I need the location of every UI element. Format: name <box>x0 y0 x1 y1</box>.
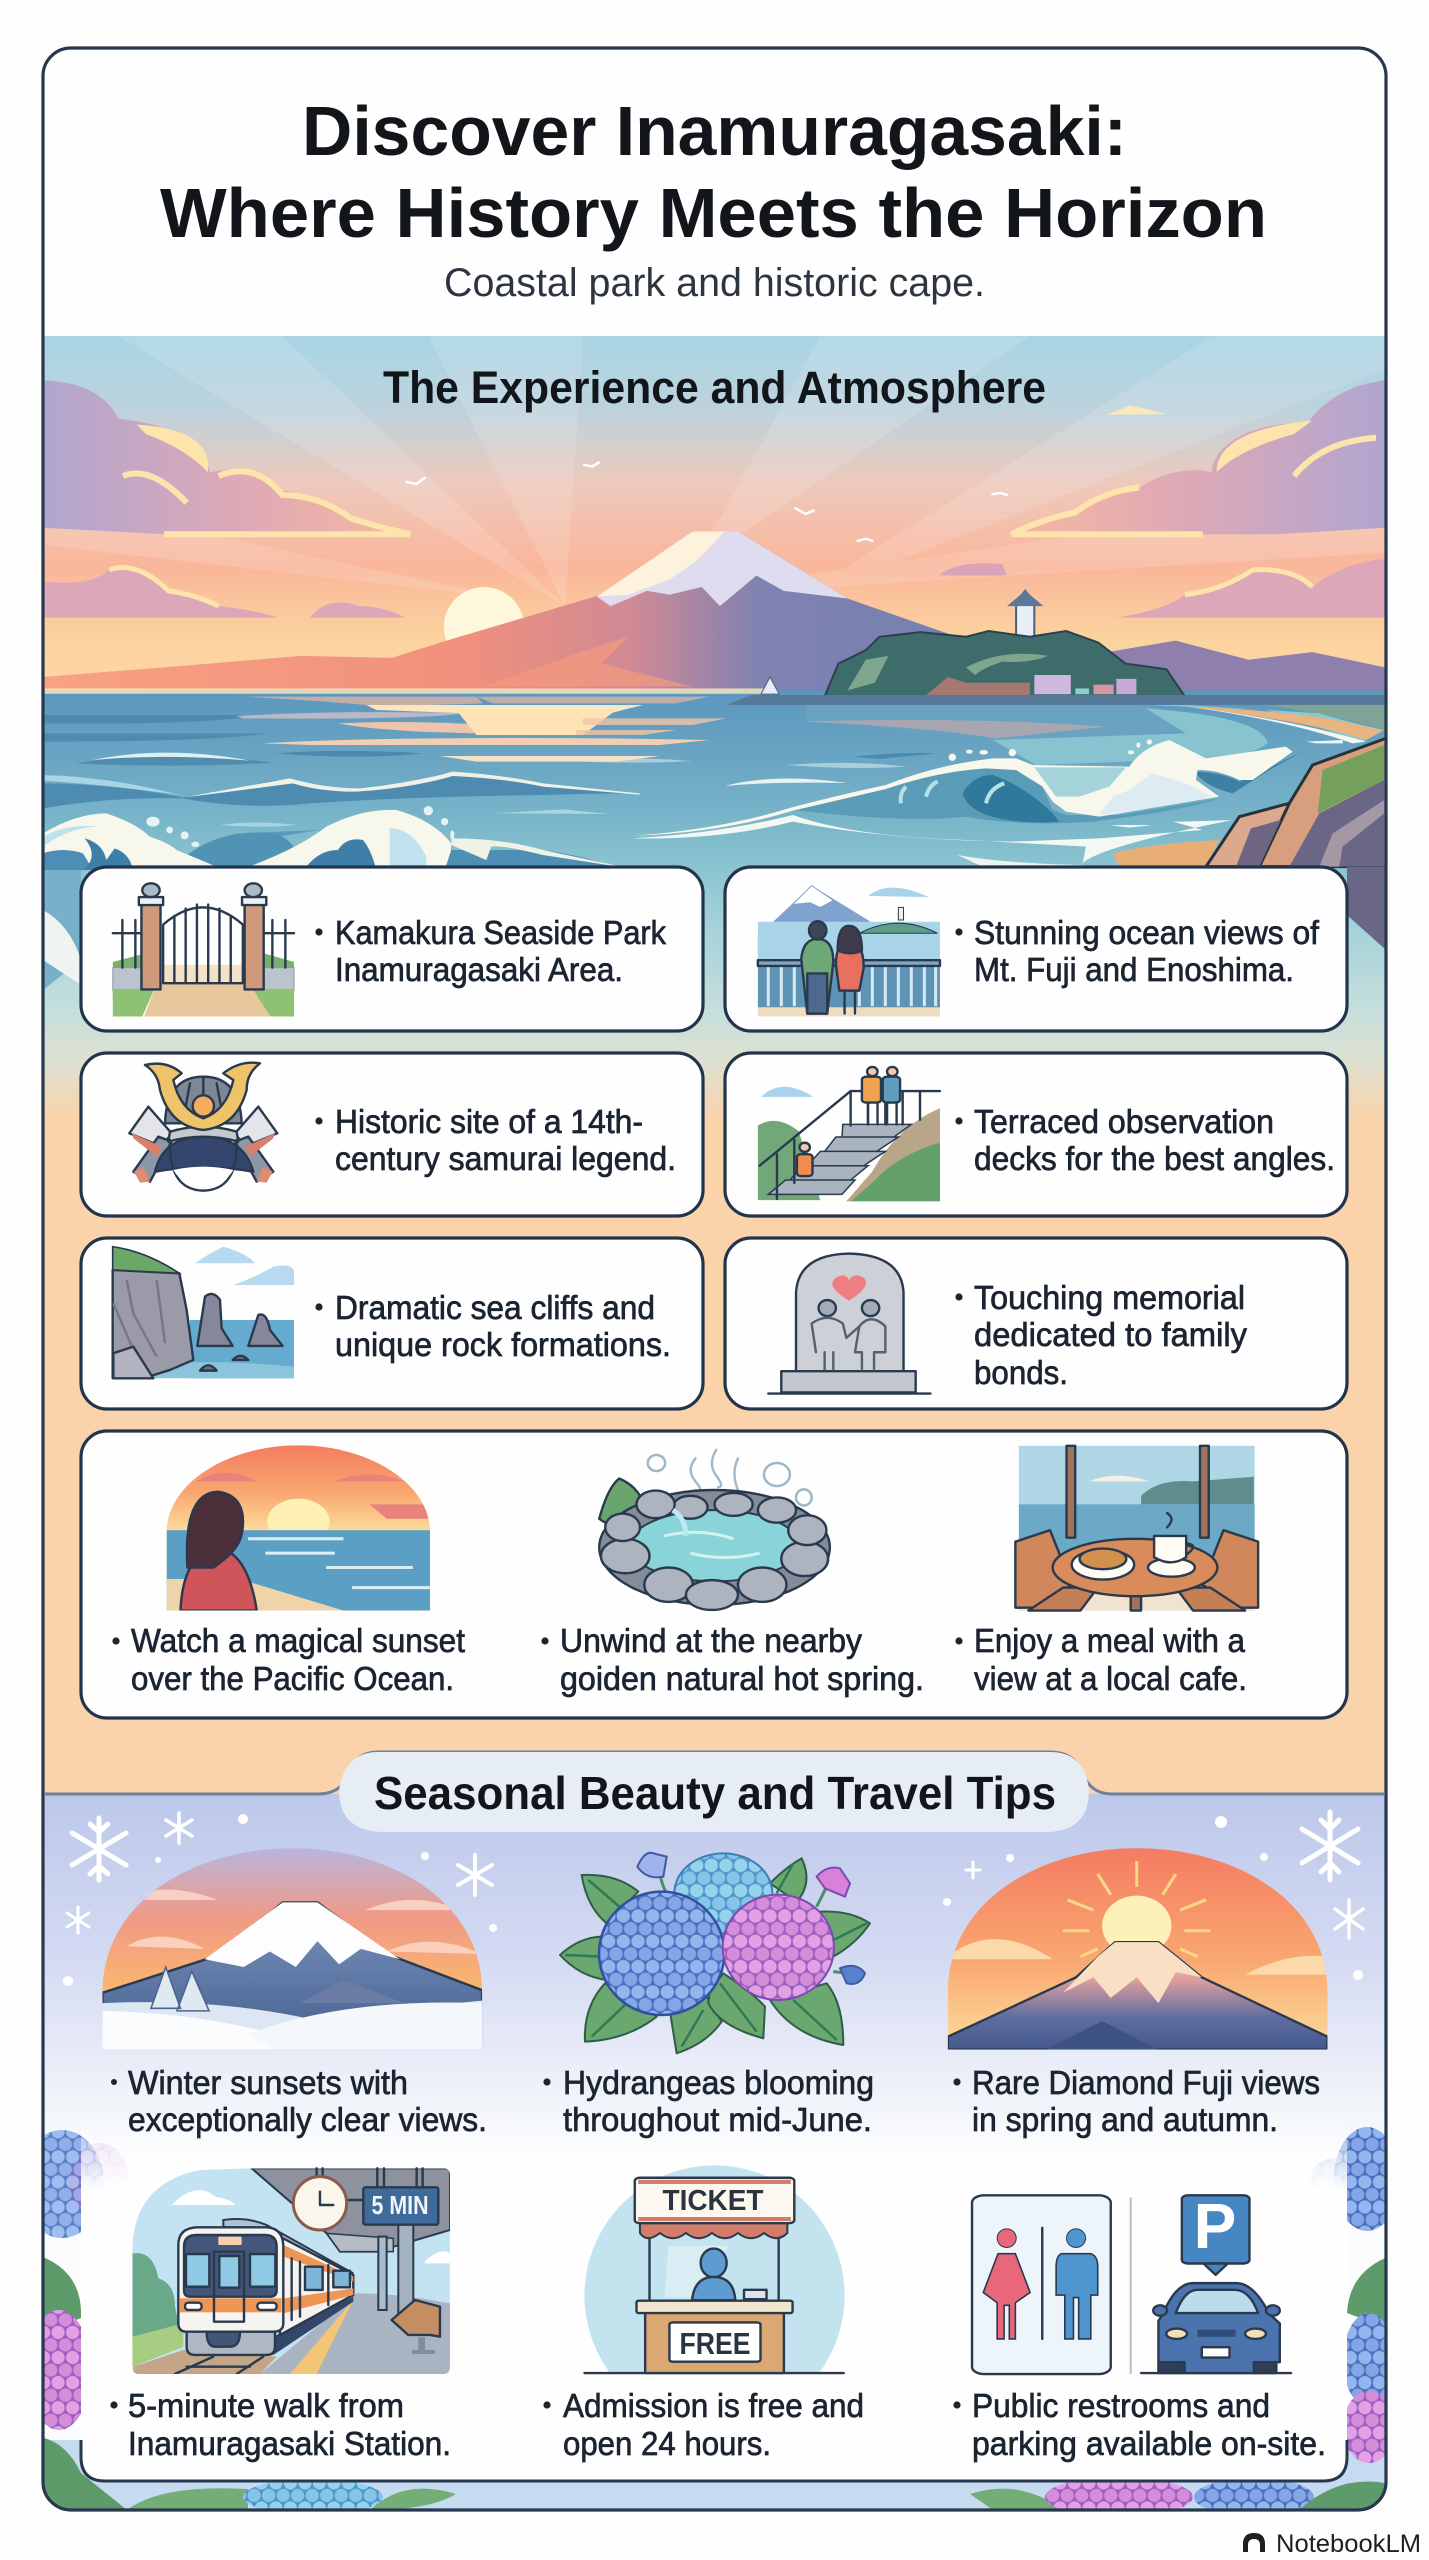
text: sunset: over the Pacific Ocean. <box>131 1660 454 1697</box>
panel: ocean views <box>725 867 1347 1031</box>
icon: sea cliffs and rocks <box>113 1247 294 1378</box>
heading pill: Seasonal Beauty and Travel Tips <box>339 1752 1089 1832</box>
icon: natural hot spring <box>599 1450 830 1610</box>
horizon glow <box>43 688 772 694</box>
icon: cafe table with ocean view <box>1015 1446 1258 1611</box>
title line 2: Where History Meets the Horizon <box>160 174 1267 252</box>
text: cafe: Enjoy a meal with a <box>974 1622 1246 1659</box>
text: ocean views: Mt. Fuji and Enoshima. <box>974 951 1294 988</box>
snow cap <box>597 532 848 606</box>
text: hydrangeas: Hydrangeas blooming <box>563 2064 874 2101</box>
text: hot spring: goiden natural hot spring. <box>560 1660 924 1697</box>
text: hydrangeas: throughout mid-June. <box>563 2101 872 2138</box>
panel: observation decks <box>725 1053 1347 1216</box>
icon: train at station <box>132 2168 450 2374</box>
label: 5 MIN: 5 MIN <box>372 2190 428 2220</box>
text: hot spring <box>541 1622 924 1697</box>
text: memorial: dedicated to family <box>974 1316 1247 1353</box>
text: admission: open 24 hours. <box>563 2425 771 2462</box>
text: hot spring: Unwind at the nearby <box>560 1622 862 1659</box>
icon: samurai helmet <box>129 1063 277 1191</box>
heading: The Experience and Atmosphere: The Experience and Atmosphere <box>383 362 1046 413</box>
text: Kamakura Seaside Park <box>315 914 666 988</box>
white lower panel <box>81 2110 1347 2481</box>
subtitle: Coastal park and historic cape. <box>444 261 985 305</box>
icon: terraced stairs <box>758 1067 940 1201</box>
panel: memorial <box>725 1238 1347 1409</box>
icon: memorial stone with heart <box>768 1254 930 1394</box>
icon: Diamond Fuji sunrise <box>948 1848 1327 2050</box>
icon: woman watching sunset <box>167 1445 430 1611</box>
icon: free ticket booth <box>584 2165 845 2373</box>
clouds left <box>43 380 410 534</box>
text: memorial: bonds. <box>974 1354 1068 1391</box>
lower panel edge <box>81 2440 1347 2481</box>
icon: hydrangeas <box>560 1853 870 2053</box>
text: winter sunsets: Winter sunsets with <box>128 2064 408 2101</box>
text: observation decks: decks for the best angles. <box>974 1140 1335 1177</box>
far hills <box>1111 640 1384 690</box>
label: FREE: FREE <box>680 2326 750 2361</box>
icon: winter Mt. Fuji sunset <box>102 1848 482 2050</box>
text: memorial: Touching memorial <box>974 1279 1245 1316</box>
sun rays <box>43 336 1385 606</box>
text: observation decks: Terraced observation <box>974 1103 1274 1140</box>
text: walk from station <box>110 2387 451 2462</box>
foam and cliff beside cards <box>43 867 1386 990</box>
text: admission: Admission is free and <box>563 2387 864 2424</box>
panel: Kamakura Seaside Park <box>81 867 703 1031</box>
text: restrooms and parking <box>953 2387 1326 2462</box>
text: samurai legend: Historic site of a 14th- <box>335 1103 643 1140</box>
text: sunset <box>112 1622 465 1697</box>
label: P: P <box>1194 2190 1236 2262</box>
hero illustration: sunset over sea with Mt. Fuji and Enoshima <box>43 336 1386 1795</box>
sun <box>444 587 523 640</box>
icon: park gate <box>113 883 294 1016</box>
clouds right <box>1012 380 1385 534</box>
title line 1: Discover Inamuragasaki: <box>302 92 1127 170</box>
title block <box>160 92 1267 305</box>
sea and waves, left half <box>43 697 726 870</box>
panel: sunset, hot spring and cafe <box>81 1431 1347 1718</box>
text: samurai legend <box>315 1103 676 1177</box>
section divider with tab <box>44 1752 1385 1794</box>
bottom blue strip <box>43 2440 1386 2512</box>
text: hydrangeas <box>543 2064 874 2138</box>
birds <box>406 462 1008 541</box>
NotebookLM badge: NotebookLM <box>1276 2530 1421 2558</box>
text: samurai legend: century samurai legend. <box>335 1140 676 1177</box>
text: memorial <box>955 1279 1247 1391</box>
text: Diamond Fuji <box>953 2064 1320 2138</box>
text: winter sunsets <box>111 2064 487 2138</box>
text: Diamond Fuji: in spring and autumn. <box>972 2101 1278 2138</box>
panel: samurai legend <box>81 1053 703 1216</box>
text: sunset: Watch a magical sunset <box>131 1622 465 1659</box>
text: Kamakura Seaside Park: Inamuragasaki Area. <box>335 951 623 988</box>
text: cafe <box>955 1622 1247 1697</box>
text: ocean views <box>955 914 1320 988</box>
text: sea cliffs: unique rock formations. <box>335 1326 671 1363</box>
text: winter sunsets: exceptionally clear views. <box>128 2101 487 2138</box>
text: observation decks <box>955 1103 1335 1177</box>
icon: couple viewing Mt. Fuji and Enoshima <box>758 886 940 1016</box>
text: sea cliffs <box>315 1289 671 1363</box>
text: walk from station: 5-minute walk from <box>128 2387 404 2424</box>
text: restrooms and parking: Public restrooms and <box>972 2387 1270 2424</box>
heading pill: Seasonal Beauty and Travel Tips: Seasonal Beauty and Travel Tips <box>374 1767 1056 1819</box>
main frame contents <box>44 336 1384 2508</box>
decorative hydrangeas: left, right and bottom <box>20 2127 1400 2517</box>
icon: restrooms and parking <box>972 2190 1291 2374</box>
enoshima island <box>729 589 1385 705</box>
text: admission <box>543 2387 864 2462</box>
text: Diamond Fuji: Rare Diamond Fuji views <box>972 2064 1320 2101</box>
title panel background <box>43 48 1386 336</box>
snowflakes and dots <box>67 1812 1363 1938</box>
label: TICKET: TICKET <box>662 2185 764 2217</box>
text: sea cliffs: Dramatic sea cliffs and <box>335 1289 655 1326</box>
section background: seasonal beauty <box>44 1794 1384 2126</box>
panel: sea cliffs <box>81 1238 703 1409</box>
text: cafe: view at a local cafe. <box>974 1660 1247 1697</box>
sea and waves, right half <box>629 700 1386 868</box>
text: Kamakura Seaside Park: Kamakura Seaside Park <box>335 914 666 951</box>
mountain <box>44 532 950 690</box>
text: restrooms and parking: parking available on-site. <box>972 2425 1326 2462</box>
text: walk from station: Inamuragasaki Station. <box>128 2425 451 2462</box>
text: ocean views: Stunning ocean views of <box>974 914 1320 951</box>
